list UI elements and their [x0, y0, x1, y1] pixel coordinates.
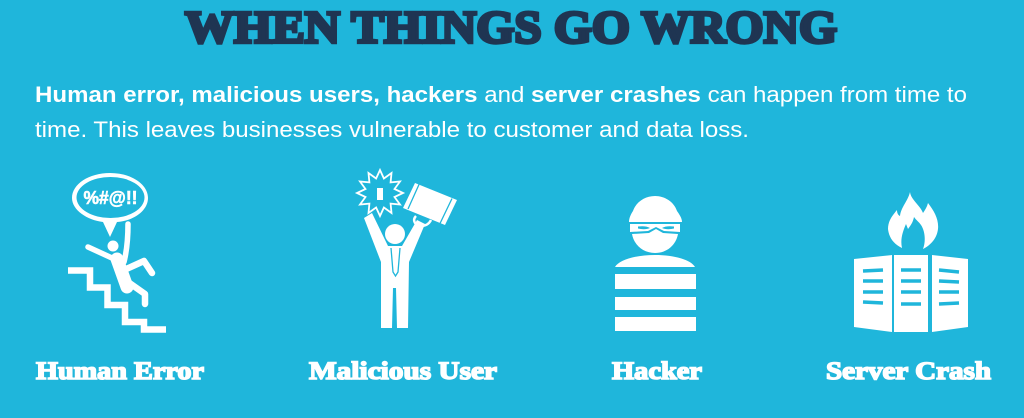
intro text: [35, 82, 967, 142]
speech bubble: [72, 173, 148, 237]
server left: [854, 255, 892, 332]
label: hacker: Hacker: [612, 358, 702, 385]
stairs: [68, 270, 166, 330]
label: malicious user: Malicious User: [309, 358, 497, 385]
shoulders: [615, 255, 695, 267]
title: WHEN THINGS GO WRONG: [185, 2, 837, 52]
stripes: [615, 274, 696, 289]
label: human error: Human Error: [36, 358, 204, 385]
intro text: Human error, malicious users, hackers and server crashes can happen from time to: [35, 82, 967, 107]
label: server crash: Server Crash: [826, 358, 991, 385]
mask: [630, 224, 680, 232]
briefcase: [403, 183, 457, 226]
intro text: time. This leaves businesses vulnerable to customer and data loss.: [35, 117, 749, 142]
icon: human error: [68, 173, 166, 330]
face: [632, 229, 678, 253]
businessman: [364, 213, 425, 328]
icon: hacker: [615, 196, 696, 331]
server right: [932, 255, 968, 332]
icon: malicious user: [357, 170, 457, 328]
speech bubble: %#@!!: [84, 188, 138, 208]
falling person: [88, 224, 152, 304]
cap: [629, 196, 682, 222]
server middle: [894, 255, 928, 332]
flame: [888, 192, 938, 249]
slots: [863, 270, 959, 304]
icon: server crash: [854, 192, 968, 332]
burst: [357, 170, 403, 216]
